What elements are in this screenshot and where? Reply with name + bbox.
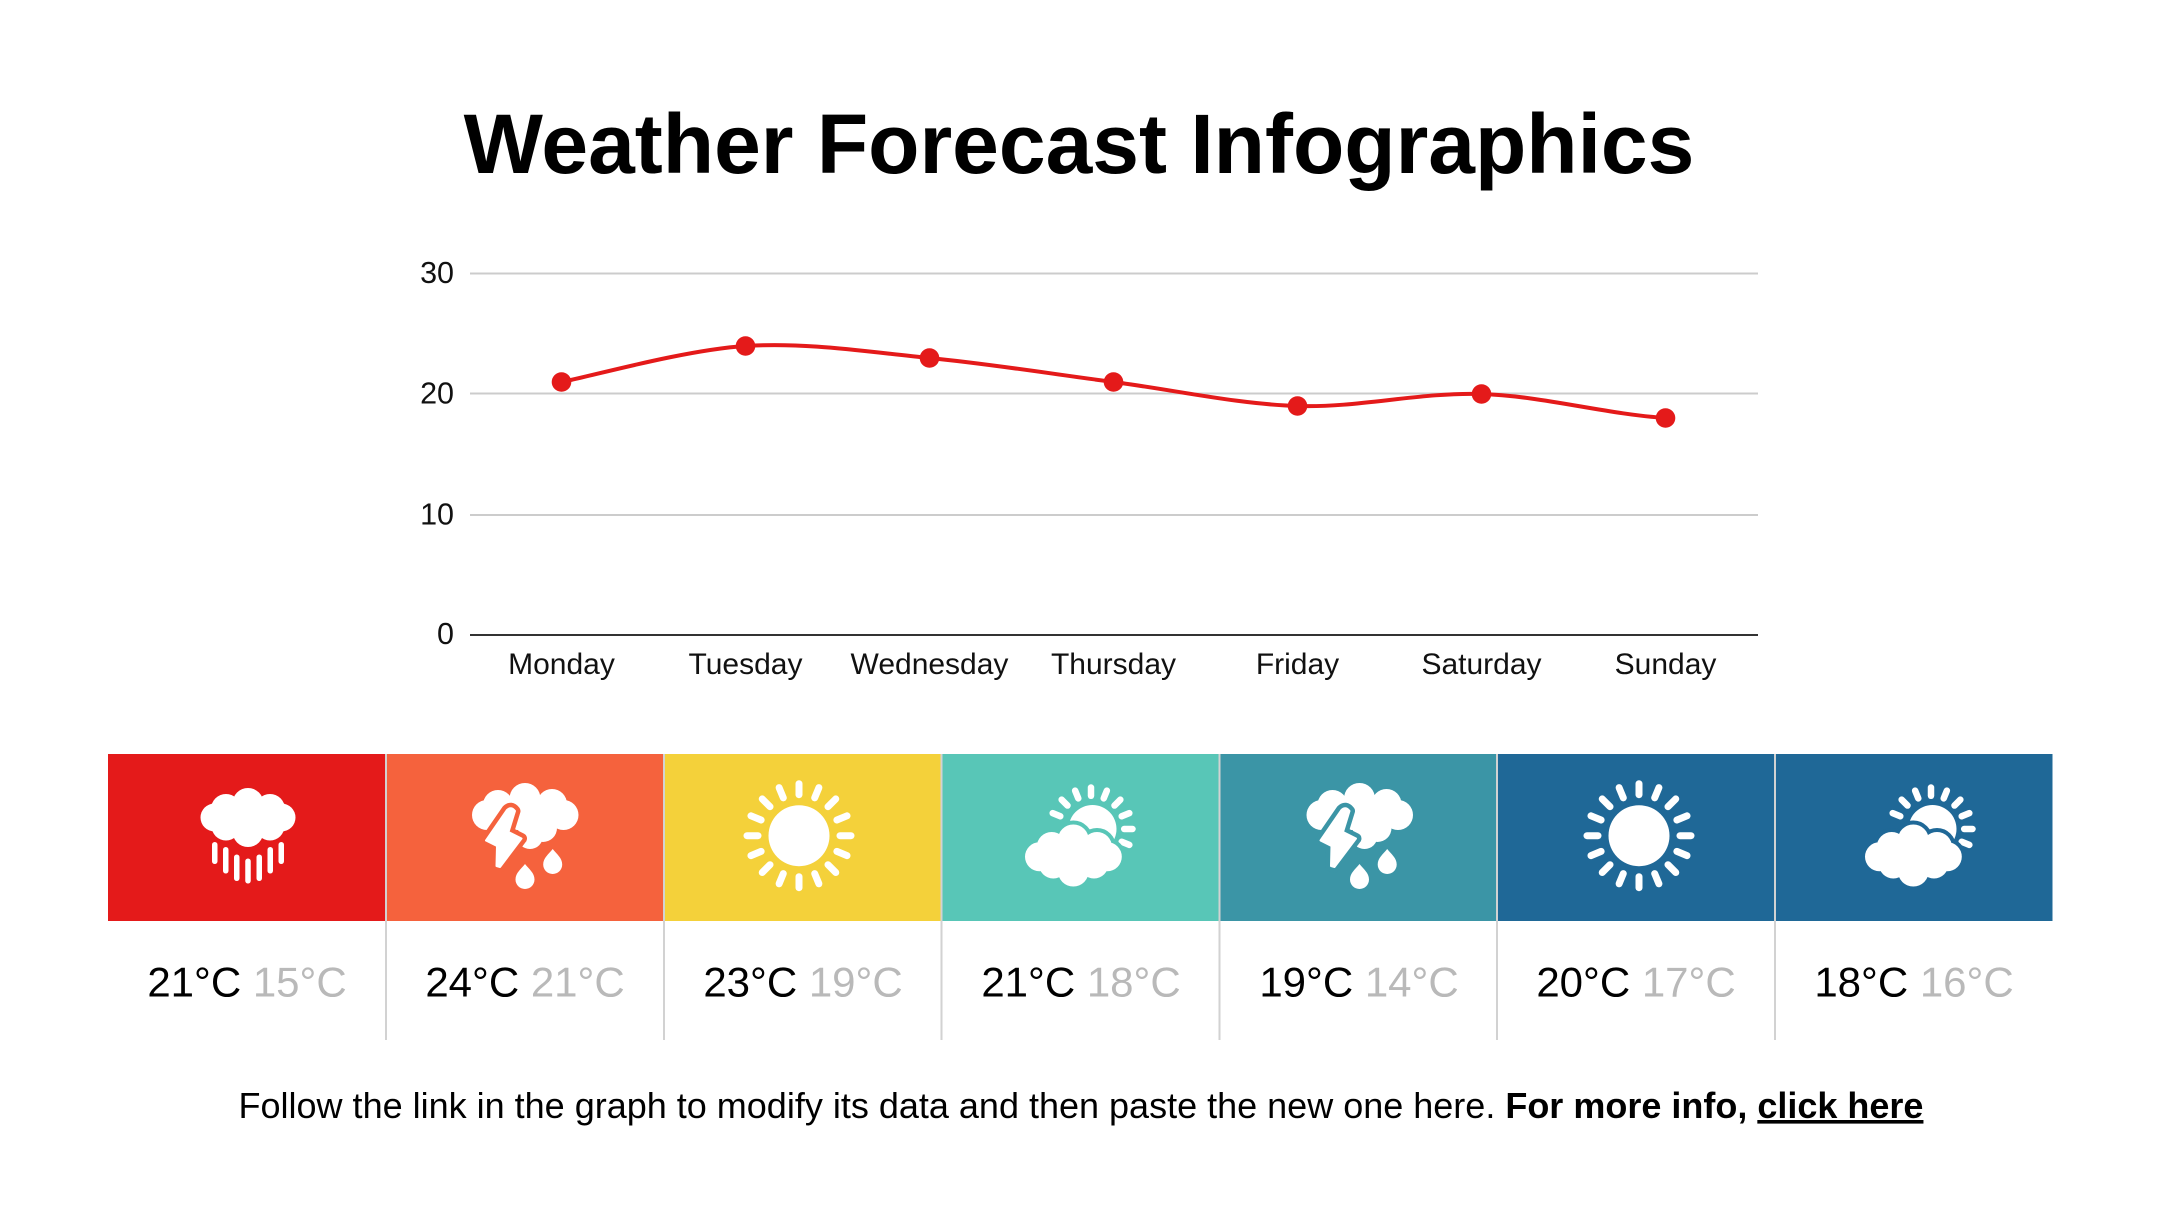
x axis labels: Friday [1256,648,1339,681]
x axis labels: Monday [508,648,615,681]
y axis labels: 0 [437,617,454,651]
icon: sun (Saturday) [1587,784,1691,888]
icon: partly cloudy (Sunday) [1865,788,1972,886]
colour swatch: Thursday [941,754,1219,921]
colour swatch: Friday [1219,754,1497,921]
icon: thunderstorm (Friday) [1306,783,1413,889]
temperatures: high and low for each day: 18°C 16°C [1814,958,2014,1006]
icon: rain cloud [200,788,296,884]
x axis labels [508,648,1716,681]
footer note: Follow the link in the graph to modify its data and then paste the new one here. For more info, click here [239,1085,1923,1126]
x axis labels: Saturday [1421,648,1542,681]
colour swatch: Tuesday [386,754,664,921]
x axis labels: Wednesday [851,648,1008,681]
line chart: weekly temperature [420,256,1758,681]
y axis labels: 20 [420,376,454,410]
icon: thunderstorm (Tuesday) [472,783,578,889]
data line [562,345,1666,418]
temperatures: high and low for each day: 24°C 21°C [425,958,625,1006]
icon: sun (Wednesday) [747,784,851,888]
x axis labels: Thursday [1051,648,1176,681]
y axis labels: 30 [420,256,454,290]
temperatures: high and low for each day: 19°C 14°C [1259,958,1459,1006]
temperatures: high and low for each day: 20°C 17°C [1536,958,1736,1006]
icon: partly cloudy (Thursday) [1025,788,1132,886]
temperatures: high and low for each day: 23°C 19°C [703,958,903,1006]
colour swatch: Wednesday [664,754,941,921]
title: Weather Forecast Infographics [464,97,1694,191]
temperatures: high and low for each day: 21°C 18°C [981,958,1181,1006]
x axis labels: Sunday [1615,648,1716,681]
temperatures: high and low for each day: 21°C 15°C [147,958,347,1006]
temperatures: high and low for each day [147,958,2014,1006]
colour swatch: Sunday [1775,754,2052,921]
y axis labels [420,256,454,651]
colour swatch: Monday [108,754,386,921]
data points [552,336,1675,428]
colour swatch: Saturday [1497,754,1775,921]
x axis labels: Tuesday [689,648,802,681]
y axis labels: 10 [420,498,454,532]
